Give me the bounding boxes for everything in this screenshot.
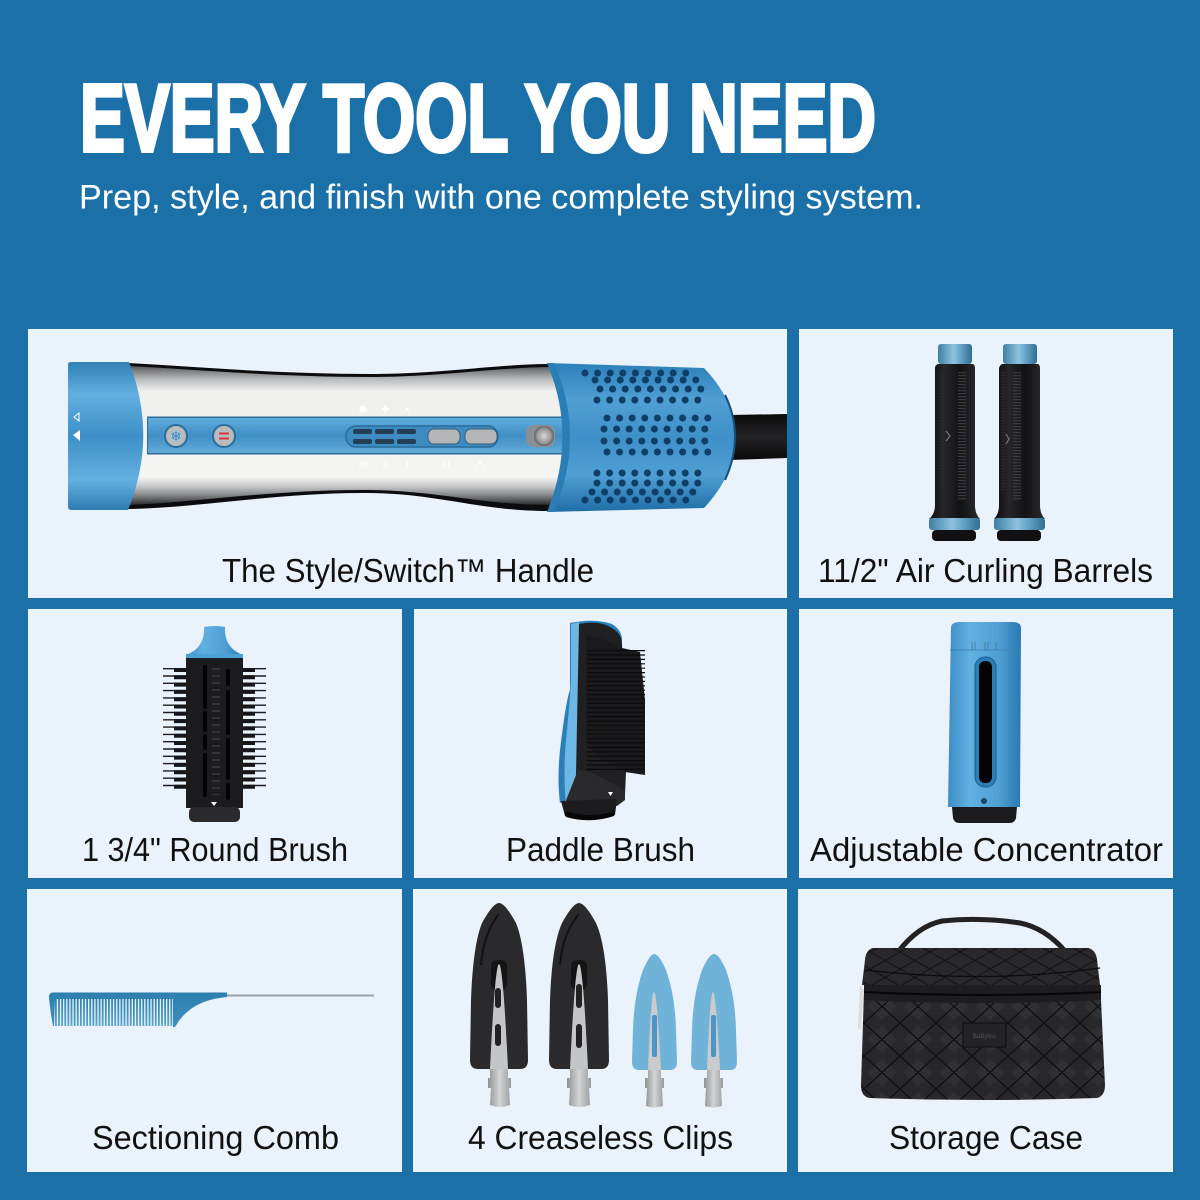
icon: creaseless clips [470,903,737,1108]
panel: air curling barrels [799,329,1173,598]
label: case: Storage Case [889,1119,1083,1156]
icon: storage case [858,919,1105,1100]
icon: styling handle [68,362,787,512]
icon: curling barrels [929,344,1045,541]
icon: paddle brush [558,621,645,820]
label: handle: The Style/Switch™ Handle [222,552,594,589]
subtitle: Prep, style, and finish with one complete styling system. [79,178,923,216]
icon: round brush [175,626,254,822]
panel: concentrator [799,609,1173,878]
icon: sectioning comb [49,992,374,1027]
icon: storage case: BaByliss [973,1034,996,1040]
icon: styling handle: ❄ [170,429,182,445]
label: clips: 4 Creaseless Clips [468,1119,733,1156]
title: EVERY TOOL YOU NEED [80,65,876,172]
panel: round brush [28,609,402,878]
panel: paddle brush [414,609,787,878]
label: concentrator: Adjustable Concentrator [810,831,1163,868]
label: comb: Sectioning Comb [92,1119,339,1156]
icon: adjustable concentrator [948,622,1021,823]
panel: storage case [798,889,1173,1172]
label: barrels: 11/2" Air Curling Barrels [818,552,1153,589]
panel: sectioning comb [27,889,402,1172]
label: round brush: 1 3/4" Round Brush [82,831,348,868]
panel: The Style/Switch handle [28,329,787,598]
panel: creaseless clips [413,889,787,1172]
label: paddle brush: Paddle Brush [506,831,695,868]
